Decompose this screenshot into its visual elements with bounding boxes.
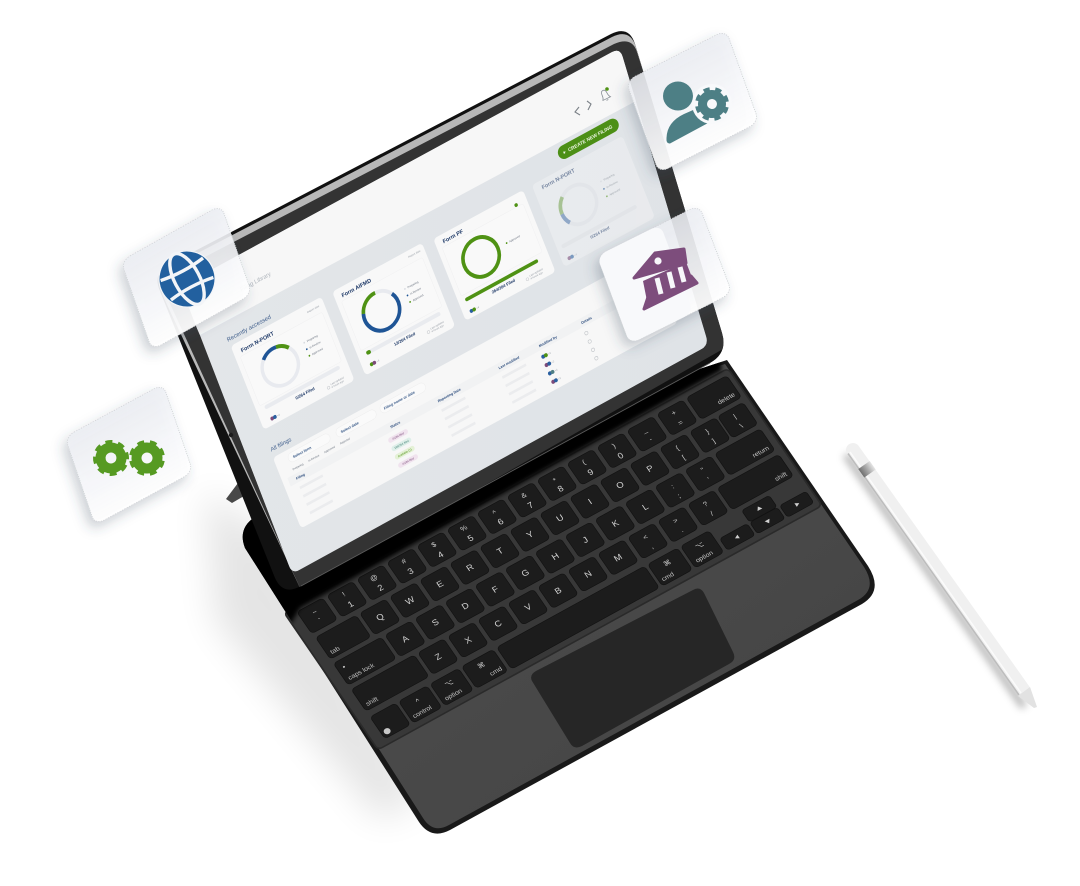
modified by avatars: +2 (554, 367, 559, 373)
details icons (584, 331, 598, 361)
table headers: Details (581, 316, 593, 325)
card: Form PF: Form PF (442, 229, 465, 245)
bottom letter row: . (678, 526, 685, 534)
qwerty row: E (435, 578, 445, 589)
card: Form N-PORT faded: Approved (609, 187, 621, 197)
card: bank icon (597, 205, 732, 344)
status pills: 0/264 filed (392, 431, 405, 441)
status pills (387, 428, 419, 469)
status legend row: Approved (324, 445, 336, 454)
bottom letter row: > (671, 516, 680, 525)
card: Form AIFMD: +4 (376, 358, 380, 363)
filing rows placeholder (299, 363, 537, 514)
bottom letter row: , (648, 542, 655, 550)
card: Form AIFMD: Preparing (407, 280, 419, 289)
table: all filings (273, 252, 678, 528)
card: Form N-PORT: Preparing (306, 333, 319, 343)
home row: F (490, 584, 501, 595)
qwerty row: \ (738, 422, 745, 430)
home row: A (400, 633, 411, 644)
filter: select form (288, 434, 329, 462)
card: Form N-PORT: Last updated (330, 375, 345, 386)
card: Form AIFMD: Report date (408, 248, 421, 259)
tablet screen (175, 40, 709, 574)
qwerty row: { (674, 443, 681, 452)
card: Form N-PORT: In Review (309, 340, 322, 350)
status legend row (292, 436, 351, 471)
home row: " (699, 465, 707, 474)
number row: ^ (490, 508, 499, 517)
card: Form AIFMD: Approved (412, 293, 424, 302)
card: Form N-PORT faded: Preparing (603, 172, 615, 182)
modifier row: ^ (414, 696, 422, 705)
bottom letter row: / (708, 509, 715, 517)
icon: globe (149, 241, 225, 317)
card: Form N-PORT: Approved (311, 346, 324, 356)
modifier row: option (695, 550, 715, 564)
number row: 3 (406, 566, 416, 576)
modifier row: ⌘ (661, 558, 673, 568)
qwerty row: I (586, 497, 594, 506)
card: Form N-PORT faded (542, 138, 654, 264)
header band (175, 40, 636, 335)
key bed and keys (284, 368, 822, 750)
status legend row: Preparing (292, 462, 304, 471)
table headers: Reporting Date (437, 387, 461, 403)
camera dot (229, 433, 233, 437)
number row: 8 (556, 483, 566, 494)
number row: ! (340, 590, 347, 598)
number row: $ (429, 540, 438, 549)
number row: 7 (526, 500, 536, 510)
card: user settings icon (626, 30, 759, 173)
home row: caps lock (347, 662, 376, 682)
number row: 5 (466, 533, 476, 543)
number row: 2 (376, 582, 386, 593)
card: Form PF: Approved (509, 234, 521, 243)
card: Form PF: 4 hours ago (530, 270, 544, 281)
home row: L (640, 502, 650, 512)
number row: - (647, 435, 655, 443)
card: Form N-PORT faded: In Review (606, 179, 619, 189)
number row: 1 (346, 599, 356, 609)
shadow under tablet on keyboard (232, 340, 722, 625)
number row: % (458, 523, 470, 533)
home row: G (519, 567, 531, 579)
home row: ' (706, 475, 713, 483)
qwerty row: tab (329, 645, 342, 656)
create new filing button (558, 118, 619, 159)
card: Form N-PORT (231, 297, 355, 430)
card: Form AIFMD: Form AIFMD (341, 278, 372, 299)
status pills: 0/264 filed (402, 456, 415, 466)
modified by avatars (541, 352, 561, 384)
tablet frame (158, 31, 730, 590)
bottom letter row (351, 454, 794, 711)
bottom letter row: M (612, 552, 624, 563)
card: Form AIFMD (332, 243, 455, 376)
number row: ` (317, 616, 324, 624)
card: Form PF: Last updated (529, 267, 544, 278)
card: Form AIFMD: 12/264 Filed (393, 331, 416, 347)
card: Form N-PORT: 4 hours ago (331, 379, 345, 389)
card: Form AIFMD: 4 hours ago (431, 323, 445, 333)
number row: ) (610, 441, 617, 450)
card: globe icon (121, 205, 252, 350)
modifier row: ⌘ (475, 660, 487, 671)
qwerty row (316, 402, 758, 659)
home row (333, 429, 775, 685)
table headers: Filing (296, 472, 305, 481)
number row: 9 (586, 467, 596, 477)
status legend row: Rejected (339, 436, 351, 446)
card: Form N-PORT: Form N-PORT (240, 331, 275, 354)
modifier row: cmd (489, 666, 504, 678)
qwerty row: } (704, 427, 711, 436)
icon: bank building (634, 249, 697, 309)
tablet stand (226, 483, 244, 503)
card: Form N-PORT: Report date (306, 304, 320, 314)
bottom letter row: < (641, 532, 650, 542)
number row: & (519, 490, 529, 500)
modifier row: control (412, 704, 434, 720)
icon: left gear (91, 438, 131, 478)
number row: * (551, 476, 559, 484)
qwerty row: | (732, 412, 738, 420)
home row: K (610, 518, 621, 529)
filter: filing name or date (383, 383, 423, 413)
modified by avatars: +2 (547, 350, 552, 356)
number row (297, 375, 742, 634)
modifier row (369, 479, 814, 739)
modifier row: cmd (661, 571, 676, 583)
card: Form N-PORT faded: Form N-PORT (541, 168, 576, 191)
notification bell (601, 87, 612, 101)
qwerty row: T (495, 545, 506, 556)
table headers (296, 316, 593, 481)
card: Form N-PORT: +4 (276, 412, 281, 418)
status pills: 198/264 filed (394, 439, 410, 450)
card: Form AIFMD: In Review (409, 286, 423, 296)
all filings heading: All filings (270, 437, 292, 454)
home row: ; (676, 492, 682, 500)
qwerty row: [ (680, 453, 687, 461)
number row: 0 (616, 450, 626, 461)
number row: = (676, 418, 685, 427)
card: Form N-PORT faded: 0/264 Filed (590, 225, 611, 240)
card: Form N-PORT faded: +4 (573, 252, 578, 257)
home row: D (460, 600, 471, 611)
number row: ( (580, 458, 588, 466)
home row: H (550, 551, 561, 562)
number row: + (669, 408, 678, 417)
qwerty row: W (403, 594, 417, 607)
card: Form AIFMD: Last updated (430, 319, 445, 331)
bottom letter row: C (492, 618, 504, 629)
card: Form N-PORT: 0/264 Filed (295, 386, 316, 401)
icon: right gear (129, 440, 165, 476)
qwerty row: R (464, 562, 476, 573)
number row: 6 (496, 516, 506, 527)
bottom letter row: V (523, 602, 534, 613)
home row: S (430, 617, 441, 628)
number row: 4 (436, 549, 446, 560)
filter: select form: Select form (292, 445, 313, 459)
qwerty row: Q (374, 611, 386, 623)
number row: _ (639, 425, 650, 435)
qwerty row: ] (710, 437, 717, 445)
filter: select date (336, 410, 376, 437)
status legend row: In Review (308, 453, 321, 463)
screen contents (226, 118, 676, 527)
table headers: Modified by (538, 335, 557, 348)
create new filing button: CREATE NEW FILING (567, 124, 614, 154)
card: Form PF: +4 (476, 305, 480, 310)
modifier row: ⌥ (693, 540, 706, 551)
number row: delete (717, 392, 737, 406)
table headers: Last modified (498, 355, 520, 370)
qwerty row: U (554, 512, 566, 524)
home row: : (669, 482, 676, 490)
card: Form PF: 264/264 Filed (491, 277, 516, 295)
bottom letter row: N (582, 569, 594, 580)
modified by avatars: +2 (551, 359, 555, 364)
number row: # (399, 557, 408, 566)
card: gears icon (65, 384, 193, 525)
number row: @ (368, 572, 379, 583)
bottom letter row: shift (774, 471, 789, 483)
modified by avatars: +2 (557, 376, 562, 381)
filter: select date: Select date (340, 421, 359, 434)
bottom letter row: ? (701, 500, 710, 509)
filter: filing name or date: Filing name or date (383, 390, 415, 411)
qwerty row: O (614, 479, 626, 491)
bottom letter row: shift (365, 696, 380, 708)
keyboard case (232, 340, 875, 834)
create new filing button: + (562, 150, 567, 157)
bottom letter row: X (463, 635, 474, 646)
trackpad (531, 589, 734, 747)
recently accessed heading: Recently accessed (226, 315, 272, 344)
home row: return (751, 445, 771, 459)
page title: Filing Library (240, 272, 272, 294)
bottom letter row: B (553, 585, 564, 596)
number row: ~ (310, 607, 319, 617)
card: Form PF (433, 190, 556, 321)
stylus pencil (846, 450, 1037, 708)
navigation chevrons (575, 101, 591, 115)
ground shadow (205, 490, 420, 820)
icon: user with gear (663, 82, 732, 144)
status pills: Available Q1 (397, 447, 413, 458)
qwerty row: Y (525, 529, 535, 540)
qwerty row: P (645, 463, 655, 474)
modifier row: option (444, 688, 464, 702)
home row: J (581, 535, 590, 545)
modifier row: ⌥ (443, 677, 455, 689)
bottom letter row: Z (433, 651, 444, 662)
table headers: Status (390, 420, 401, 429)
